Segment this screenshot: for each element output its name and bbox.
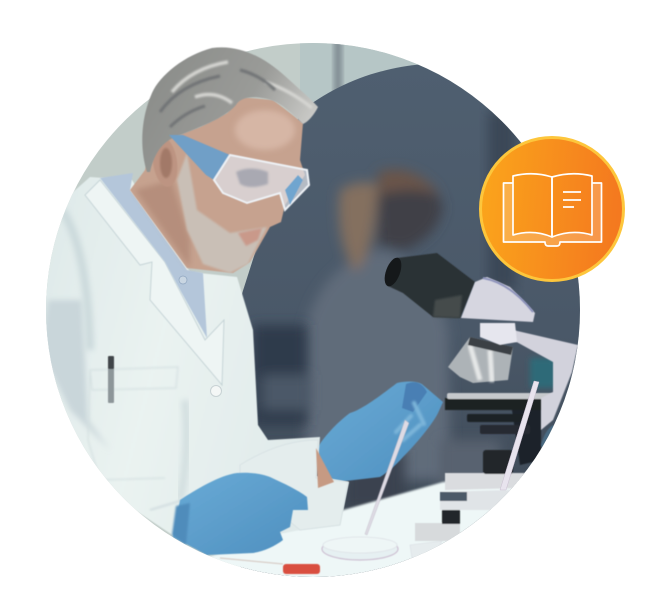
microscope base and boxes xyxy=(415,393,558,541)
microscope upper body xyxy=(381,253,535,383)
red pipette bulb xyxy=(220,558,320,574)
beard xyxy=(177,153,267,273)
badge circle xyxy=(480,138,624,280)
pen xyxy=(108,356,114,403)
petri dish xyxy=(322,537,442,560)
glass slide tube xyxy=(500,381,539,490)
lab coat xyxy=(30,177,349,555)
glove: right hand with pipette xyxy=(318,382,443,482)
lab table xyxy=(210,476,522,577)
badge: book icon xyxy=(480,138,624,280)
microscope objectives xyxy=(448,337,513,383)
lapel xyxy=(85,180,224,385)
shirt xyxy=(100,173,207,338)
wrist xyxy=(316,448,334,488)
scientist figure xyxy=(30,47,349,555)
coat shadows xyxy=(46,298,102,440)
dark laboratory backdrop xyxy=(240,64,600,600)
binocular head xyxy=(386,253,475,318)
neck and face xyxy=(130,97,305,273)
background colleague xyxy=(305,169,450,480)
neck shadow xyxy=(135,180,190,268)
circular photo background xyxy=(46,43,580,577)
illustration: scientist in laboratory with book badge xyxy=(46,43,625,577)
safety goggles xyxy=(169,135,309,210)
white camera housing xyxy=(461,277,535,322)
glass pipette xyxy=(365,420,409,535)
microscope arm xyxy=(513,330,578,430)
glove: left hand xyxy=(173,473,308,555)
shirt collar button xyxy=(179,276,187,284)
icon: open book xyxy=(504,174,602,246)
sleeve fold xyxy=(300,472,349,530)
chest pocket xyxy=(88,367,178,480)
ear xyxy=(154,141,177,181)
hair xyxy=(142,47,318,172)
teal reflection xyxy=(530,358,556,388)
forehead highlight xyxy=(235,110,295,150)
background blurred window strip xyxy=(488,110,516,290)
coat button xyxy=(210,386,222,396)
nosepiece xyxy=(480,323,517,345)
blurred shelves xyxy=(252,325,500,510)
